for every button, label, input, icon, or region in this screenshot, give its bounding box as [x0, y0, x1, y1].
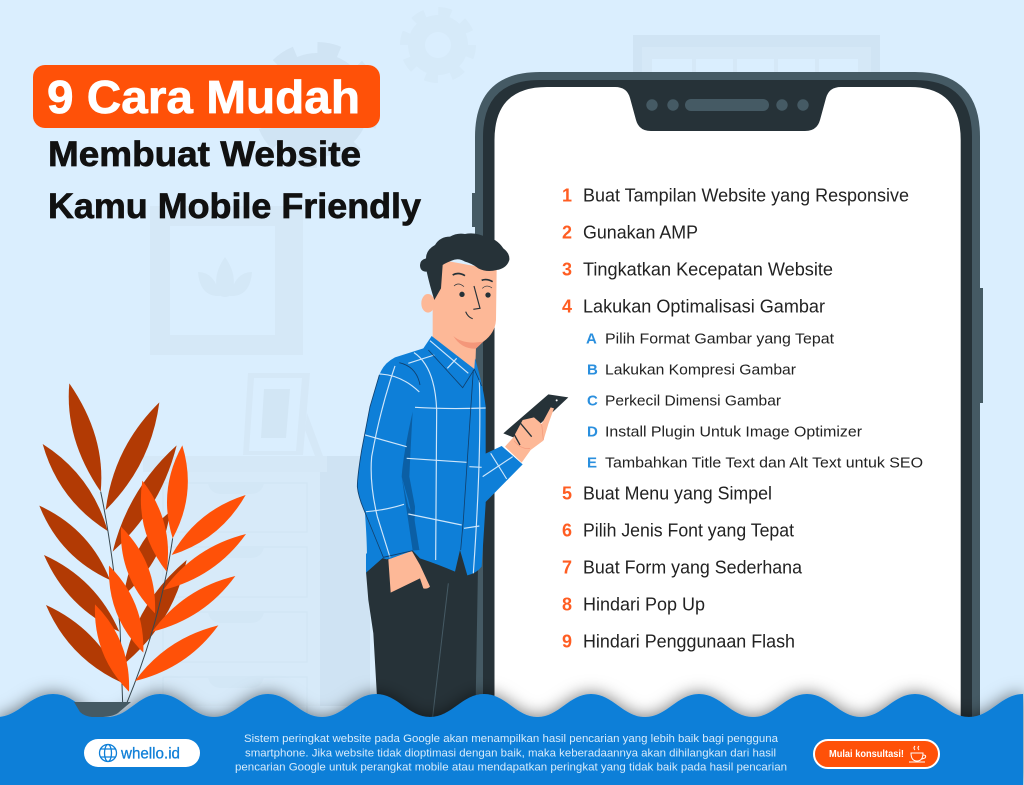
- item 6: 6: [562, 520, 572, 540]
- orange leaves: [95, 445, 246, 692]
- footer paragraph: smartphone. Jika website tidak dioptimasi dengan baik, maka keberadaannya akan dihilangkan dari hasil: [245, 748, 776, 760]
- phone: [472, 72, 983, 785]
- background: wall picture: [150, 206, 303, 355]
- background: dresser side: [320, 456, 370, 706]
- item 7: 7: [562, 558, 572, 578]
- coffee cup icon: [909, 746, 926, 762]
- shirt check lines: [365, 341, 513, 573]
- dark leaves: [39, 383, 187, 683]
- item 8: Hindari Pop Up: [583, 594, 705, 614]
- hand in pocket: [388, 551, 430, 593]
- background: dresser: [143, 456, 327, 717]
- title block: [33, 65, 422, 226]
- item 4: 4: [562, 296, 572, 316]
- background: large gear: [260, 48, 374, 162]
- whello logo pill: [84, 739, 200, 767]
- sub-item E: Tambahkan Title Text dan Alt Text untuk SEO: [605, 454, 923, 472]
- sub-item A: Pilih Format Gambar yang Tepat: [605, 330, 835, 348]
- background room illustration: [143, 11, 880, 717]
- item 7: Buat Form yang Sederhana: [583, 558, 803, 578]
- item 9: 9: [562, 632, 572, 652]
- neck and face: [421, 260, 497, 377]
- title badge: [33, 65, 380, 128]
- globe icon: [100, 744, 116, 762]
- plant pot: [74, 702, 131, 717]
- numbered list: [562, 186, 923, 652]
- item 3: 3: [562, 260, 572, 280]
- wave footer: [0, 694, 1023, 785]
- brand name: whello.id: [120, 746, 180, 762]
- handheld smartphone: [503, 394, 568, 437]
- phone body: [475, 72, 980, 785]
- item 3: Tingkatkan Kecepatan Website: [583, 260, 833, 280]
- button label: Mulai konsultasi!: [829, 749, 904, 760]
- item 2: Gunakan AMP: [583, 222, 698, 242]
- trousers: [366, 537, 478, 720]
- item 5: 5: [562, 484, 572, 504]
- footer paragraph: pencarian Google untuk perangkat mobile atau mendapatkan peringkat yang tidak baik pada hasil pencarian: [235, 762, 787, 774]
- sub-item C: C: [587, 392, 598, 410]
- sub-item D: Install Plugin Untuk Image Optimizer: [605, 424, 862, 440]
- sleeve right: [482, 446, 523, 506]
- item 5: Buat Menu yang Simpel: [583, 484, 772, 504]
- phone side buttons: [472, 193, 983, 403]
- item 1: 1: [562, 186, 572, 206]
- item 2: 2: [562, 222, 572, 242]
- background: small gear: [404, 11, 472, 79]
- phone screen: [494, 87, 961, 785]
- sub-item D: D: [587, 424, 598, 440]
- sub-item A: A: [586, 330, 597, 348]
- title line 1: 9 Cara Mudah: [47, 71, 360, 123]
- consult button: [814, 740, 939, 768]
- wave band: [0, 694, 1023, 785]
- footer paragraph: Sistem peringkat website pada Google akan menampilkan hasil pencarian yang lebih baik bagi pengguna: [244, 733, 779, 745]
- shirt dark seams: [357, 350, 482, 557]
- sub-item E: E: [587, 454, 597, 472]
- title line 3: Kamu Mobile Friendly: [48, 187, 422, 226]
- sub-item B: B: [587, 362, 598, 378]
- sub-item C: Perkecil Dimensi Gambar: [605, 392, 781, 410]
- background: photo frame: [243, 373, 323, 456]
- item 6: Pilih Jenis Font yang Tepat: [583, 520, 794, 540]
- background: window: [633, 35, 880, 87]
- plant: [39, 383, 246, 703]
- item 4: Lakukan Optimalisasi Gambar: [583, 296, 825, 316]
- title line 2: Membuat Website: [48, 135, 361, 174]
- sub-item B: Lakukan Kompresi Gambar: [605, 362, 796, 378]
- phone notch sensors: [646, 99, 809, 111]
- item 9: Hindari Penggunaan Flash: [583, 632, 795, 652]
- item 8: 8: [562, 594, 572, 614]
- hair: [420, 233, 509, 300]
- face features: [453, 273, 493, 319]
- shirt: [357, 336, 486, 575]
- man holding phone: [357, 233, 568, 720]
- plant stems: [101, 492, 173, 703]
- item 1: Buat Tampilan Website yang Responsive: [583, 186, 909, 206]
- holding hand: [505, 407, 554, 463]
- footer paragraph: [235, 733, 787, 774]
